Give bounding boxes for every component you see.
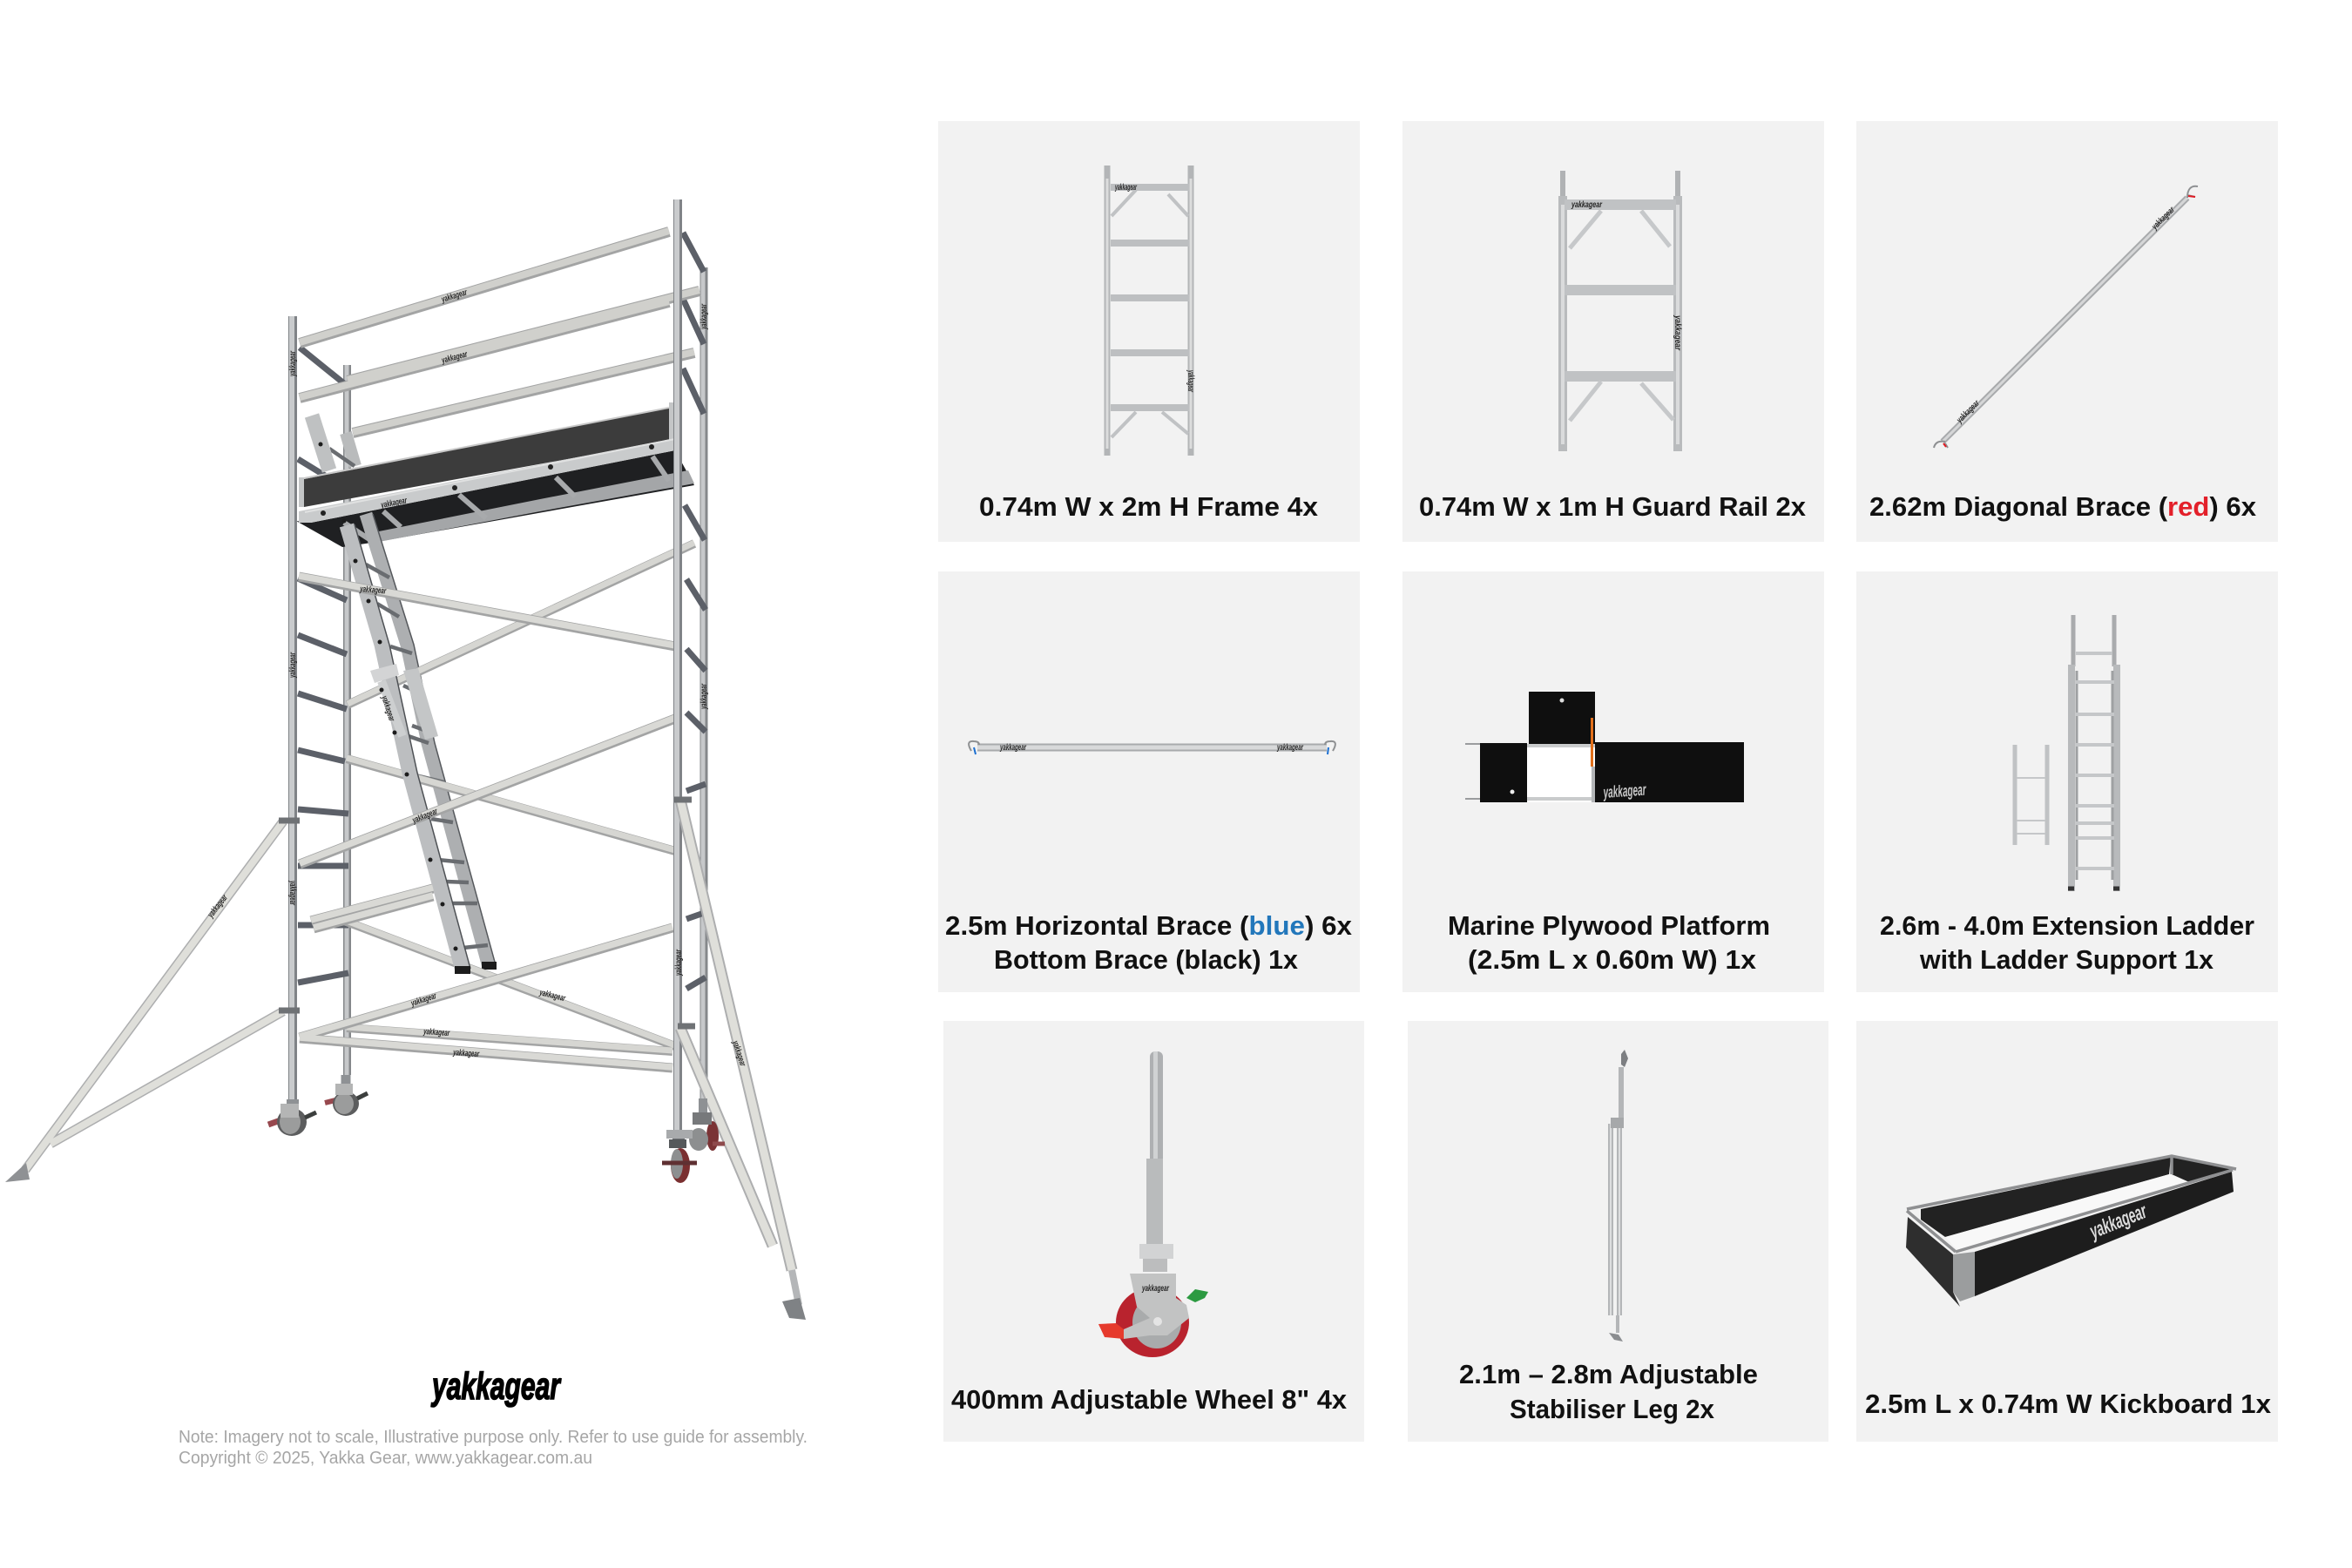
front left and front right poles (292, 199, 678, 1132)
tower brand tags: yakkagear (359, 585, 387, 597)
left stabiliser legs (5, 821, 300, 1182)
footer note (179, 1427, 808, 1468)
panel: kickboard (1856, 1021, 2278, 1442)
caption: 2.62m Diagonal Brace (red) 6x (1869, 491, 2257, 522)
tower brand tags: yakkagear (409, 991, 438, 1009)
back left and back right poles (347, 267, 704, 1098)
tower brand tags: yakkagear (538, 988, 567, 1004)
extension ladder drawing (2068, 615, 2119, 891)
front braces (299, 576, 675, 1068)
tower brand tags: yakkagear (287, 880, 297, 906)
platform aluminium edge (299, 438, 675, 523)
ladder support drawing (2015, 745, 2047, 845)
tower brand tags: yakkagear (288, 652, 298, 679)
right side rungs (683, 233, 706, 989)
tower brand tags: yakkagear (440, 287, 469, 305)
tower brand tags: yakkagear (674, 949, 684, 977)
kickboard drawing: yakkagear (2086, 1200, 2151, 1244)
frame drawing: yakkagear (1114, 183, 1138, 193)
footer note: Note: Imagery not to scale, Illustrative purpose only. Refer to use guide for assembly. (179, 1427, 808, 1447)
frame drawing (1107, 166, 1195, 456)
caption: 2.5m Horizontal Brace (blue) 6x (945, 910, 1353, 941)
castor wheel back left (325, 1075, 368, 1116)
guard rails (300, 231, 700, 433)
diagonal brace drawing (1934, 186, 2198, 448)
tower brand tags (206, 287, 747, 1068)
caption: 0.74m W x 1m H Guard Rail 2x (1419, 491, 1807, 522)
panel: extension ladder (1856, 571, 2278, 992)
caption: 2.5m L x 0.74m W Kickboard 1x (1865, 1389, 2272, 1419)
wheel drawing (1098, 1051, 1208, 1357)
rear ladder rail and rungs (329, 433, 497, 970)
tower brand tags: yakkagear (422, 1027, 450, 1038)
footer note: Copyright © 2025, Yakka Gear, www.yakkagear.com.au (179, 1448, 592, 1468)
panel: stabiliser leg: Stabiliser Leg 2x (1510, 1394, 1715, 1424)
tower brand tags: yakkagear (700, 303, 709, 330)
right stabiliser legs (674, 800, 806, 1320)
platform underside (296, 450, 694, 547)
scaffold tower illustration (5, 199, 806, 1320)
tower brand tags: yakkagear (700, 683, 709, 710)
diagonal brace drawing: yakkagear (2150, 205, 2177, 233)
tower brand tags: yakkagear (410, 807, 440, 826)
panel: extension ladder: with Ladder Support 1x (1919, 944, 2214, 975)
panel: guard rail (1402, 121, 1824, 542)
tower brand tags: yakkagear (440, 349, 469, 366)
castor wheel back right (689, 1098, 725, 1151)
brand logo: yakkagear (431, 1365, 562, 1408)
tower brand tags: yakkagear (288, 350, 298, 377)
panel: frame (938, 121, 1360, 542)
guard rail drawing: yakkagear (1571, 200, 1603, 210)
extension ladder front rail (312, 416, 470, 974)
caption: 2.1m – 2.8m Adjustable (1459, 1359, 1758, 1389)
castor wheel front left (268, 1099, 316, 1136)
panel: diagonal brace (1856, 121, 2278, 542)
frame drawing: yakkagear (1186, 369, 1195, 393)
castor wheel front right (662, 1130, 697, 1183)
tower brand tags: yakkagear (730, 1039, 747, 1068)
panel: plywood platform (1402, 571, 1824, 992)
horizontal brace drawing: yakkagear (1276, 743, 1304, 753)
guard rail drawing: yakkagear (1673, 314, 1682, 351)
stabiliser drawing (1609, 1050, 1628, 1342)
guard rail drawing (1563, 171, 1682, 451)
diagonal and horizontal braces behind ladder (344, 543, 694, 1051)
panel: horizontal brace: Bottom Brace (black) 1x (994, 944, 1299, 975)
tower brand tags: yakkagear (452, 1048, 480, 1059)
panel: stabiliser leg (1408, 1021, 1828, 1442)
panel: plywood platform: (2.5m L x 0.60m W) 1x (1468, 944, 1757, 975)
caption: Marine Plywood Platform (1448, 910, 1770, 941)
wheel drawing: yakkagear (1141, 1284, 1170, 1294)
platform drawing: yakkagear (1602, 781, 1647, 802)
platform aluminium edge: yakkagear (380, 496, 409, 510)
horizontal brace drawing (969, 741, 1335, 754)
kickboard drawing (1906, 1156, 2236, 1307)
horizontal brace drawing: yakkagear (999, 743, 1027, 753)
diagonal brace drawing: yakkagear (1955, 398, 1982, 426)
tower brand tags: yakkagear (206, 893, 230, 920)
caption: 2.6m - 4.0m Extension Ladder (1880, 910, 2254, 941)
caption: 0.74m W x 2m H Frame 4x (979, 491, 1319, 522)
panel: horizontal brace (938, 571, 1360, 992)
platform drawing (1465, 692, 1744, 802)
left side rungs (298, 348, 348, 983)
caption: 400mm Adjustable Wheel 8" 4x (951, 1384, 1348, 1415)
panel: adjustable wheel (943, 1021, 1364, 1442)
extension ladder front rail: yakkagear (379, 694, 396, 723)
platform black deck (299, 402, 672, 507)
